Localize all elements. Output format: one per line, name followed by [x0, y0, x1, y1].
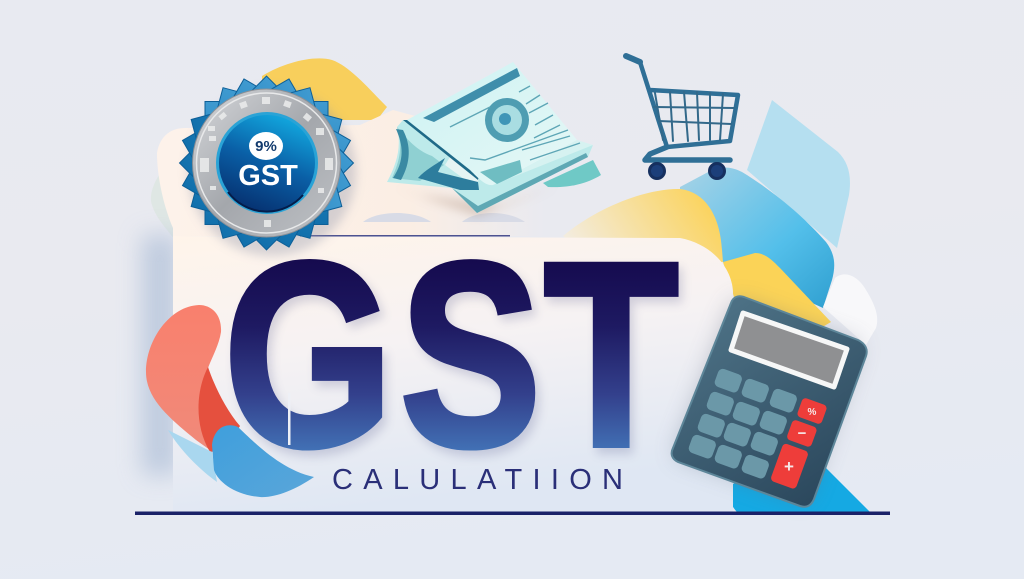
- calculator key labels: %: [808, 407, 817, 418]
- rule: top thin line: [300, 235, 510, 236]
- icon: GST seal badge: GST: [238, 160, 298, 192]
- icon: shopping cart: [626, 56, 738, 178]
- shape: bottom blue blob: [729, 440, 870, 512]
- shape: yellow blob middle: [563, 189, 723, 262]
- shape: upper yellow blob: [262, 58, 387, 120]
- title: GST letters shadow: G: [228, 215, 397, 508]
- shape: panel back shadow: [142, 235, 178, 475]
- shape: grey tab right: [462, 213, 525, 222]
- calculator key labels: [784, 407, 817, 476]
- shape: light blue back blob: [747, 100, 850, 248]
- icon: seal shadow: [188, 88, 356, 256]
- title: GST letters shadow: [228, 214, 682, 508]
- title: GST: [224, 208, 678, 502]
- title: GST: T: [544, 209, 678, 501]
- rule: bottom line: [135, 512, 890, 515]
- panel: main front panel: [173, 236, 733, 512]
- title: GST letters shadow: T: [548, 215, 682, 507]
- shape: white right blob: [823, 274, 877, 345]
- shape: grey tab left: [363, 213, 431, 222]
- icon: calculator: [672, 296, 867, 507]
- icon: GST seal badge: [180, 76, 353, 250]
- calculator red keys: [770, 397, 828, 490]
- shape: left sage blob: [151, 160, 175, 240]
- seal ring marks: [200, 97, 333, 227]
- panel: back folder: [157, 110, 545, 236]
- shape: blue blob: [680, 168, 834, 308]
- shape: left abstract coral and blue cluster: [146, 305, 314, 497]
- detail: G slit: [288, 393, 290, 445]
- title: GST: S: [400, 208, 541, 501]
- calculator key labels: −: [798, 425, 807, 442]
- title: GST: G: [224, 209, 393, 502]
- title: GST letters shadow: S: [404, 214, 545, 507]
- icon: GST seal badge: 9%: [255, 138, 277, 155]
- calculator keys: [687, 367, 798, 480]
- shape: yellow blob right: [723, 253, 831, 340]
- icon: calculator shadow: [675, 300, 860, 500]
- calculator screen: [731, 313, 847, 387]
- calculator key labels: +: [784, 457, 794, 476]
- icon: folded banknote: [387, 62, 601, 213]
- subtitle: CALULATIION: [332, 464, 623, 496]
- icon: bill shadow: [392, 185, 560, 216]
